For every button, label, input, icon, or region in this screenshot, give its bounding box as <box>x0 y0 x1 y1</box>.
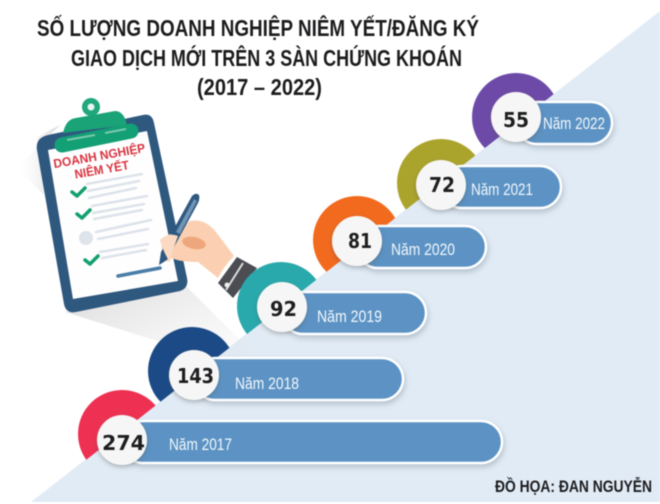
value: 143 <box>177 364 214 388</box>
checklist <box>72 174 160 276</box>
value circle <box>169 350 219 400</box>
cast shadow behind clipboard <box>16 125 250 376</box>
clipboard heading: NIÊM YẾT <box>73 157 130 182</box>
value: 55 <box>503 108 529 132</box>
value circle <box>97 415 147 465</box>
wristband <box>218 257 257 298</box>
year: Năm 2017 <box>169 435 232 454</box>
title: SỐ LƯỢNG DOANH NGHIỆP NIÊM YẾT/ĐĂNG KÝ <box>37 14 479 41</box>
step: 2018 <box>148 327 403 415</box>
step: 2019 <box>237 262 426 350</box>
year: Năm 2018 <box>235 374 299 393</box>
arc <box>147 326 230 402</box>
clipboard paper <box>48 131 178 299</box>
hand <box>162 220 234 278</box>
title: (2017 – 2022) <box>197 74 322 100</box>
value: 274 <box>102 431 145 455</box>
value: 81 <box>348 229 372 253</box>
year: Năm 2019 <box>317 307 382 326</box>
pen <box>159 194 199 265</box>
year: Năm 2021 <box>471 180 533 199</box>
year: Năm 2020 <box>391 240 455 259</box>
title <box>37 14 479 100</box>
step: 2020 <box>313 196 486 284</box>
arc <box>77 389 156 460</box>
bar <box>516 102 612 144</box>
value: 92 <box>270 297 297 321</box>
value circle <box>416 160 466 210</box>
arc <box>471 72 554 148</box>
arc <box>312 195 396 272</box>
bar <box>122 421 502 463</box>
title: GIAO DỊCH MỚI TRÊN 3 SÀN CHỨNG KHOÁN <box>71 44 462 71</box>
bar <box>194 358 403 400</box>
arc <box>236 261 317 334</box>
icon: hand holding pen <box>159 194 257 298</box>
bar <box>357 226 486 268</box>
year: Năm 2022 <box>543 114 605 133</box>
clip: green holder <box>62 98 131 145</box>
clipboard heading: DOANH NGHIỆP <box>52 140 146 171</box>
clipboard board <box>37 115 187 312</box>
value circle <box>257 282 307 332</box>
step: 2021 <box>397 139 561 227</box>
step: 2017 <box>78 390 502 478</box>
icon: clipboard <box>37 98 187 312</box>
value circle <box>491 92 541 142</box>
bar <box>441 166 561 208</box>
value circle <box>332 216 382 266</box>
value: 72 <box>429 173 455 197</box>
bar <box>282 292 426 334</box>
clipboard heading <box>52 140 149 185</box>
arc <box>396 138 476 210</box>
step: 2022 <box>472 73 612 161</box>
